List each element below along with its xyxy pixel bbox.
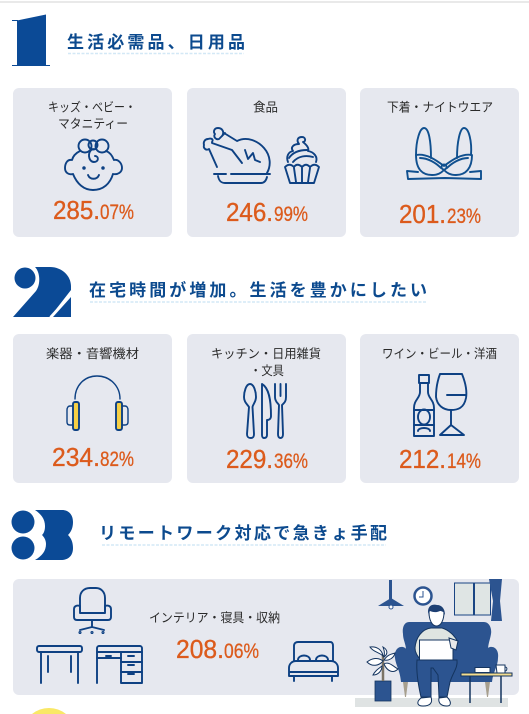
value: 212.14%: 14% xyxy=(447,450,481,473)
label: kids xyxy=(48,100,136,131)
value: 212.14%: 212. xyxy=(399,446,446,474)
value: 234.82% xyxy=(52,444,134,472)
card: wine xyxy=(360,334,519,483)
icon: cupcake xyxy=(285,137,319,183)
value: 234.82%: 82% xyxy=(100,448,134,471)
value: 246.99% xyxy=(226,199,308,227)
card: interior xyxy=(13,579,519,695)
label: interior: インテリア・寝具・収納 xyxy=(149,610,280,625)
icon: baby xyxy=(65,140,122,190)
icon: office chair xyxy=(74,588,111,633)
value: 208.06%: 208. xyxy=(176,636,224,664)
section 1 heading: 生活必需品、日用品 xyxy=(67,33,245,52)
value: 229.36%: 229. xyxy=(226,446,273,474)
label: kids: マタニティー xyxy=(58,117,128,131)
value: 246.99%: 246. xyxy=(226,199,273,227)
section 3 heading: リモートワーク対応で急きょ手配 xyxy=(99,523,387,543)
label: kids: キッズ・ベビー・ xyxy=(48,100,136,114)
window and curtain xyxy=(454,579,502,621)
value: 234.82%: 234. xyxy=(52,444,100,472)
section 1 number xyxy=(12,14,50,66)
value: 285.07%: 07% xyxy=(100,201,134,224)
potted plant xyxy=(367,647,398,701)
icon: headphones xyxy=(67,376,128,430)
icon: cutlery xyxy=(244,384,286,438)
value: 212.14% xyxy=(399,446,481,474)
illustration: person working on sofa xyxy=(355,579,512,707)
label: kitchen xyxy=(211,346,321,378)
label: underwear: 下着・ナイトウエア xyxy=(387,100,493,114)
floor xyxy=(355,698,508,707)
value: 201.23% xyxy=(399,201,481,229)
value: 208.06%: 06% xyxy=(224,640,259,663)
icon: table xyxy=(37,646,82,683)
icon: bed xyxy=(289,642,338,681)
icon: roast chicken xyxy=(204,128,270,183)
label: wine: ワイン・ビール・洋酒 xyxy=(382,346,497,361)
sofa xyxy=(395,622,498,682)
card: kids xyxy=(13,88,172,237)
section 2 number xyxy=(13,267,71,317)
side table and cup xyxy=(461,665,512,703)
icon: bra xyxy=(407,128,481,179)
section 3 number xyxy=(12,510,73,560)
wall clock xyxy=(414,588,432,604)
label: food: 食品 xyxy=(253,100,278,114)
value: 208.06% xyxy=(176,636,259,664)
value: 285.07% xyxy=(53,197,134,225)
icon: bottle and wine glass xyxy=(414,374,466,436)
card: instruments xyxy=(13,334,172,483)
yellow circle xyxy=(32,708,66,714)
label: instruments: 楽器・音響機材 xyxy=(46,346,139,361)
label: kitchen: ・文具 xyxy=(250,364,284,378)
value: 201.23%: 201. xyxy=(399,201,446,229)
card: underwear xyxy=(360,88,519,237)
label: kitchen: キッチン・日用雑貨 xyxy=(211,346,321,361)
value: 246.99%: 99% xyxy=(274,203,308,226)
card: kitchen xyxy=(187,334,346,483)
pendant lamp xyxy=(378,580,404,609)
value: 285.07%: 285. xyxy=(53,197,100,225)
value: 229.36%: 36% xyxy=(274,450,308,473)
value: 201.23%: 23% xyxy=(447,205,481,228)
section 2 heading: 在宅時間が増加。生活を豊かにしたい xyxy=(89,280,427,300)
card: food xyxy=(187,88,346,237)
man xyxy=(415,605,458,706)
sofa legs xyxy=(403,682,490,697)
icon: desk xyxy=(97,646,142,683)
value: 229.36% xyxy=(226,446,308,474)
